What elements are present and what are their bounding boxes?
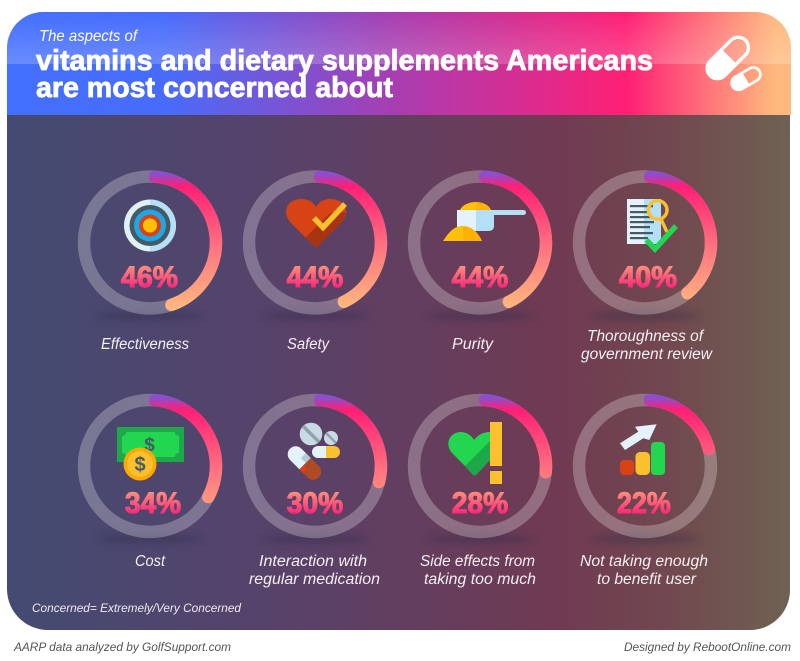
icon: scoop of powder [443, 202, 526, 241]
ring: Effectiveness 46% [84, 176, 216, 353]
ring: Side effects from taking too much 28% [414, 400, 546, 588]
panel: header banner [7, 12, 791, 115]
ring: Cost 34%: Cost [135, 553, 166, 570]
ring: Purity 44%: 44% [452, 261, 508, 294]
ring: Side effects from taking too much 28%: taking too much [424, 571, 536, 588]
title: vitamins and dietary supplements Americans [36, 45, 653, 77]
panel: main background [7, 114, 790, 630]
ring: Effectiveness 46%: Effectiveness [101, 336, 189, 353]
icon: rising bars with arrow [620, 424, 665, 475]
icon: target [124, 200, 176, 252]
ring: Interaction with regular medication 30%: Interaction with [259, 553, 367, 570]
ring: Cost 34% [84, 400, 216, 570]
icon: header pills [702, 33, 763, 93]
ring: Purity 44% [414, 176, 546, 353]
ring: Cost 34%: 34% [125, 487, 181, 520]
icon: banknote and coin: $ [134, 454, 146, 476]
footnote: Concerned= Extremely/Very Concerned [32, 601, 241, 615]
ring: Thoroughness of government review 40%: 40% [619, 261, 677, 294]
ring: Interaction with regular medication 30% [249, 400, 381, 588]
ring: Not taking enough to benefit user 22%: Not taking enough [580, 553, 708, 570]
ring: Safety 44% [249, 176, 381, 353]
ring: Side effects from taking too much 28%: Side effects from [420, 553, 535, 570]
ring: Side effects from taking too much 28%: 28% [452, 487, 508, 520]
ring: Effectiveness 46%: 46% [121, 261, 178, 294]
ring: Thoroughness of government review 40%: government review [581, 346, 714, 363]
title [36, 28, 653, 104]
icon: assorted pills [284, 423, 340, 483]
ring: Purity 44%: Purity [452, 336, 494, 353]
ring: Not taking enough to benefit user 22%: to benefit user [597, 571, 697, 588]
ring: Interaction with regular medication 30%: 30% [287, 487, 343, 520]
ring: Not taking enough to benefit user 22% [579, 400, 711, 588]
icon: heart with check [286, 199, 346, 248]
designer credit: Designed by RebootOnline.com [624, 640, 791, 654]
icon: banknote and coin: $ [144, 435, 155, 456]
ring: Safety 44%: Safety [287, 336, 330, 353]
icon: document with magnifier and check [627, 199, 676, 249]
icon: banknote and coin [117, 427, 184, 480]
icon: green heart with exclamation mark [448, 422, 502, 484]
ring: Safety 44%: 44% [287, 261, 343, 294]
source credit: AARP data analyzed by GolfSupport.com [13, 640, 231, 654]
ring: Thoroughness of government review 40%: Thoroughness of [587, 328, 705, 345]
ring: Not taking enough to benefit user 22%: 22% [617, 487, 671, 520]
title: The aspects of [39, 28, 138, 45]
title: are most concerned about [36, 72, 393, 104]
ring: Thoroughness of government review 40% [579, 176, 714, 363]
ring: Interaction with regular medication 30%: regular medication [249, 571, 380, 588]
